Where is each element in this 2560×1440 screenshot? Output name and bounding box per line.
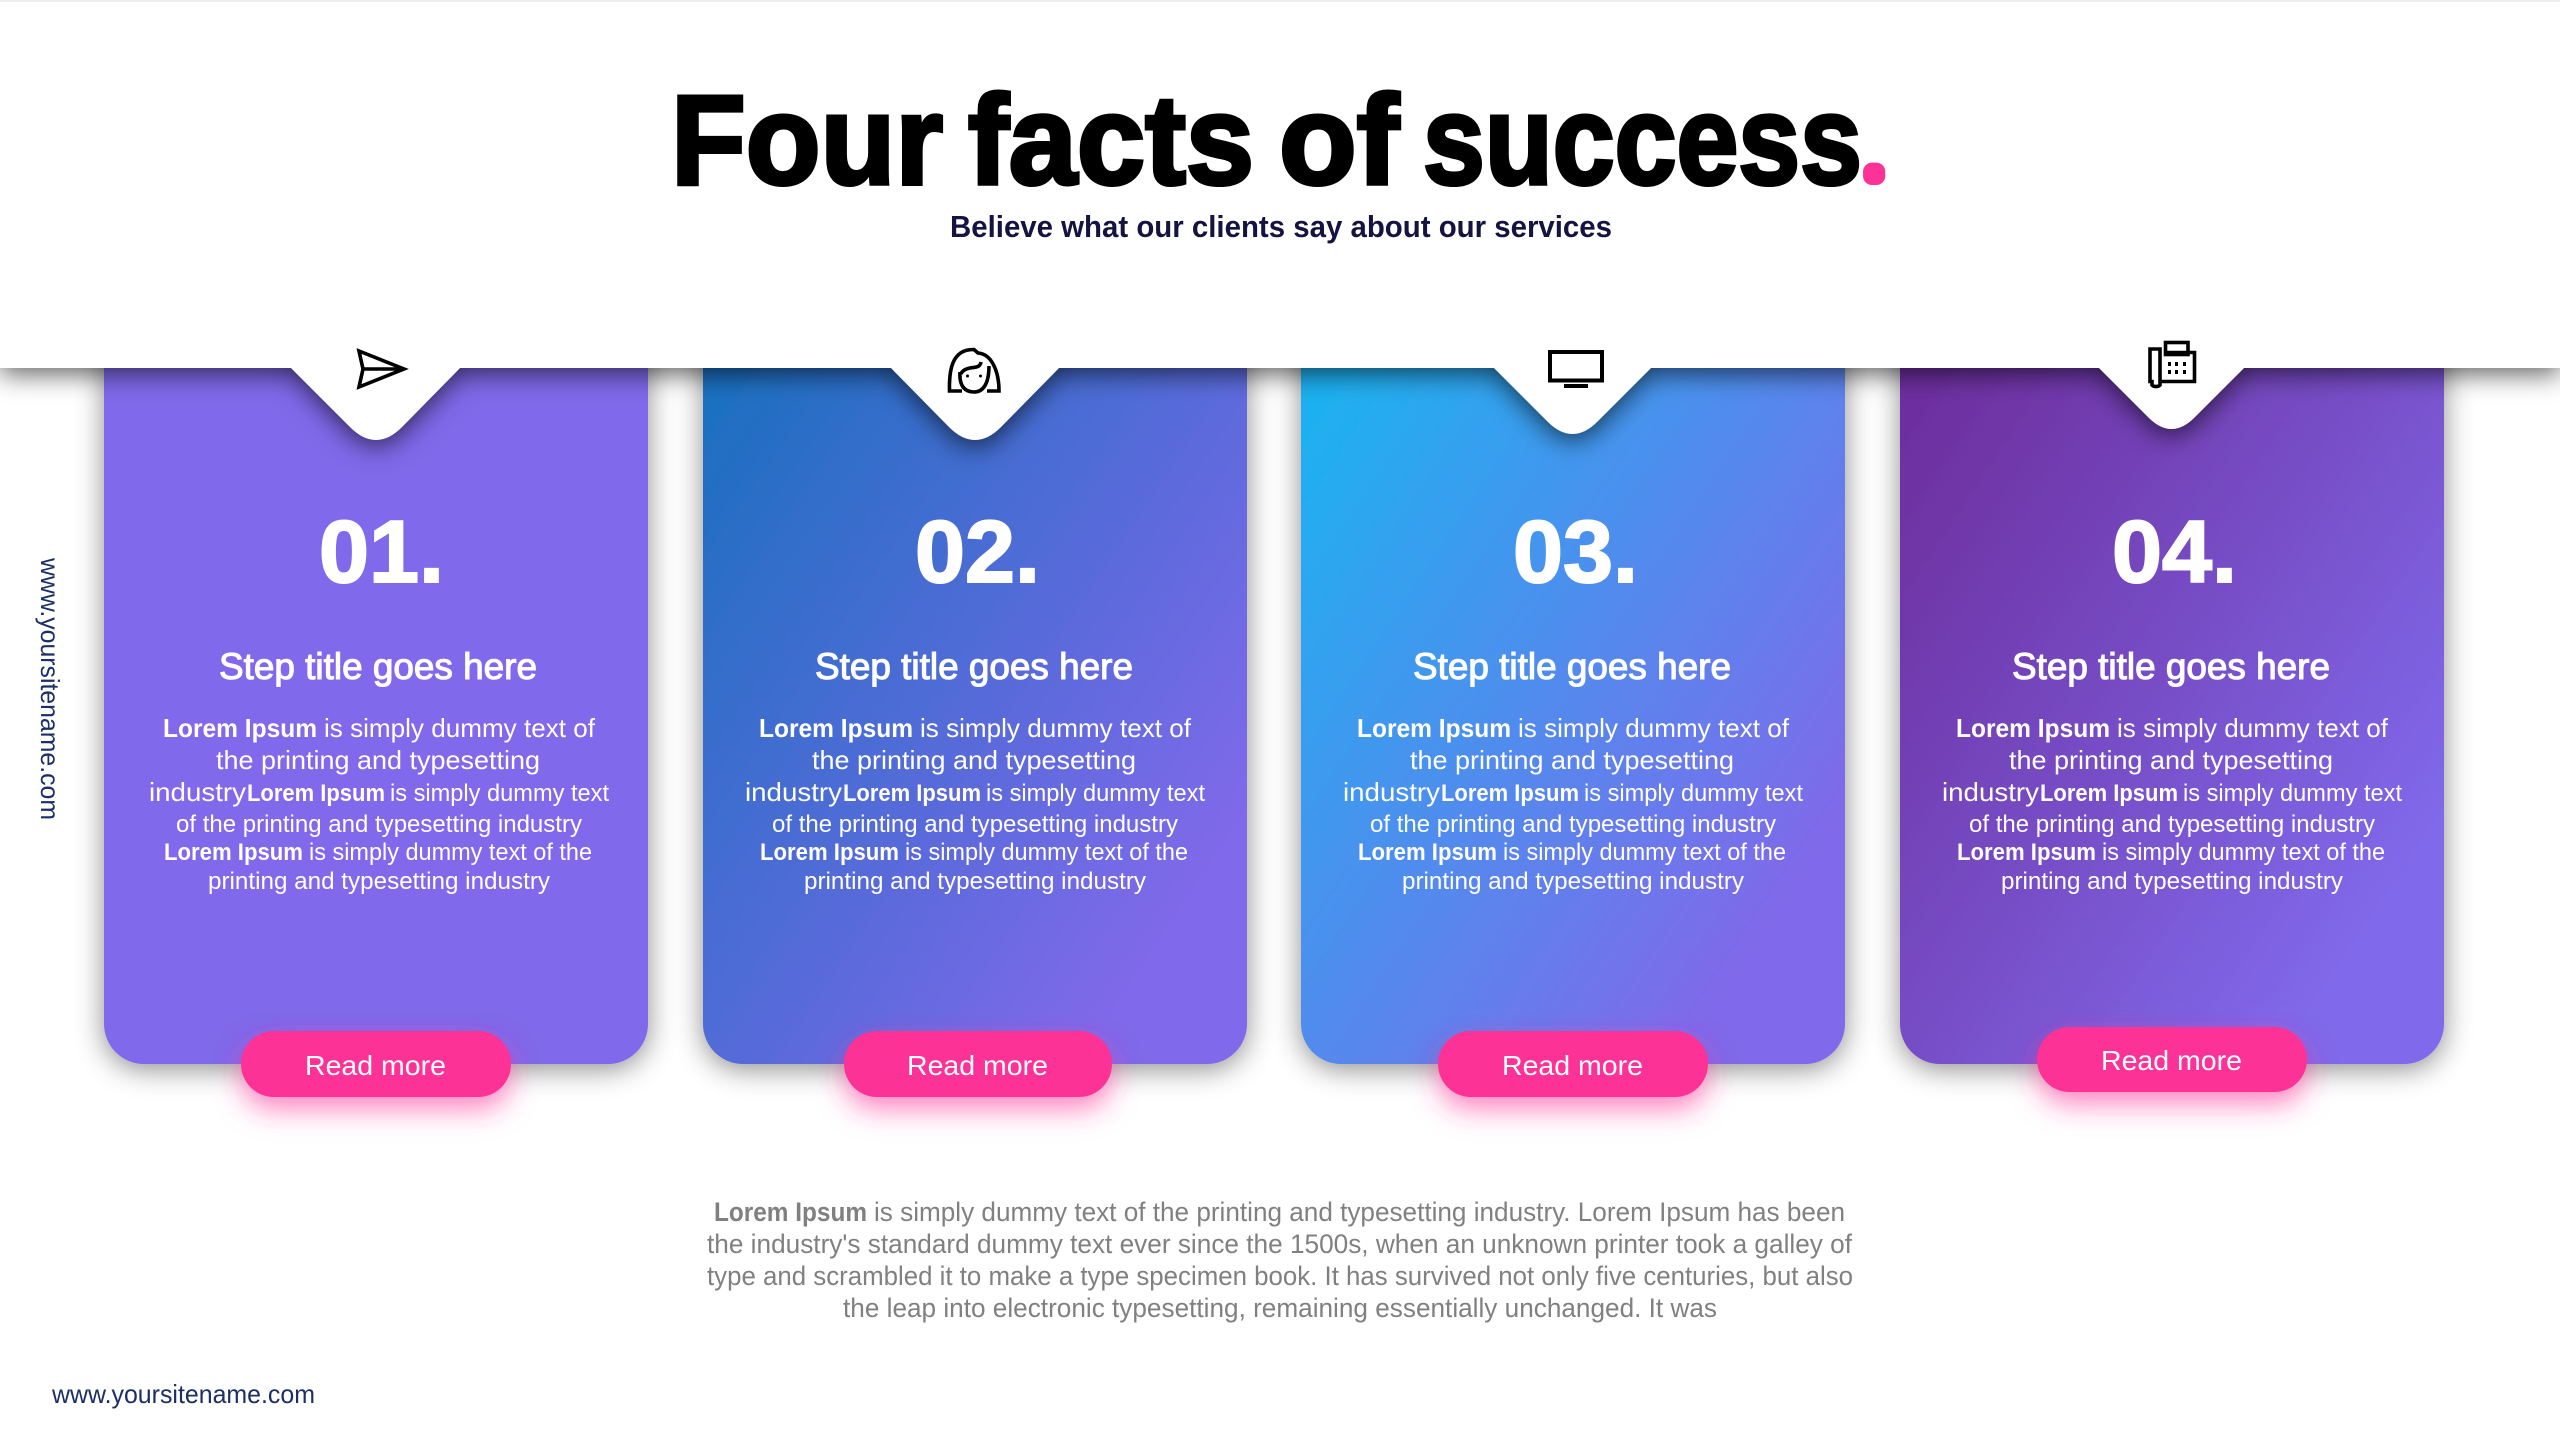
card 4 body text: industry xyxy=(1942,777,2039,807)
card 4 step title: Step title goes here xyxy=(2012,646,2330,687)
bottom paragraph xyxy=(707,1197,1853,1323)
card 2 body text: is simply dummy text of the xyxy=(905,839,1188,866)
card 4 body text: Lorem Ipsum xyxy=(1956,713,2110,743)
card 3 body text xyxy=(1343,713,1803,895)
bottom paragraph: Lorem Ipsum xyxy=(714,1197,867,1227)
card 1 number: 01. xyxy=(319,502,444,601)
card 3 body text: Lorem Ipsum xyxy=(1358,839,1497,866)
card 1 body text: is simply dummy text of the xyxy=(309,839,592,866)
card 2 body text: printing and typesetting industry xyxy=(804,868,1146,895)
icon: woman face xyxy=(949,349,999,392)
card 3 body text: industry xyxy=(1343,777,1440,807)
card 3 step title: Step title goes here xyxy=(1413,646,1731,687)
card 2 body text: Lorem Ipsum xyxy=(760,839,899,866)
card 2 body text: the printing and typesetting xyxy=(812,745,1136,775)
icon: fax machine xyxy=(2150,342,2194,387)
card 2 step title: Step title goes here xyxy=(815,646,1133,687)
card 4 body text: Lorem Ipsum xyxy=(2040,780,2178,807)
icon: monitor xyxy=(1550,352,1602,388)
card 4 body text: is simply dummy text xyxy=(2183,780,2402,807)
card 1 read more button: Read more xyxy=(305,1050,446,1081)
title xyxy=(671,69,1878,211)
card 4 body text: printing and typesetting industry xyxy=(2001,868,2343,895)
card 1 body text: of the printing and typesetting industry xyxy=(176,811,582,838)
card 2 body text: Lorem Ipsum xyxy=(759,713,913,743)
card 1 body text: is simply dummy text of xyxy=(324,713,596,743)
card 3 body text: of the printing and typesetting industry xyxy=(1370,811,1776,838)
card 3 read more button: Read more xyxy=(1502,1050,1643,1081)
card 1 body text: Lorem Ipsum xyxy=(164,839,303,866)
card 3 body text: is simply dummy text of xyxy=(1518,713,1790,743)
card 4 body text xyxy=(1942,713,2402,895)
panel: card 4 xyxy=(1900,290,2444,1092)
card 4 read more button xyxy=(2037,1027,2307,1092)
card 2 body text xyxy=(745,713,1205,895)
card 4 body text: the printing and typesetting xyxy=(2009,745,2333,775)
card 3 body text: is simply dummy text of the xyxy=(1503,839,1786,866)
card 1 body text: the printing and typesetting xyxy=(216,745,540,775)
card 1 body text: industry xyxy=(149,777,246,807)
title: facts xyxy=(968,69,1254,211)
bottom paragraph: the industry's standard dummy text ever since the 1500s, when an unknown printer took a galley of xyxy=(707,1229,1852,1259)
card 2 body text: of the printing and typesetting industry xyxy=(772,811,1178,838)
bottom paragraph: is simply dummy text of the printing and typesetting industry. Lorem Ipsum has been xyxy=(874,1197,1845,1227)
vertical side url: www.yoursitename.com xyxy=(35,557,65,820)
bottom paragraph: the leap into electronic typesetting, remaining essentially unchanged. It was xyxy=(843,1293,1717,1323)
card 1 body text xyxy=(149,713,609,895)
card 1 body text: printing and typesetting industry xyxy=(208,868,550,895)
card 1 body text: Lorem Ipsum xyxy=(163,713,317,743)
title: of xyxy=(1279,69,1400,211)
card 2 body text: Lorem Ipsum xyxy=(843,780,981,807)
card 4 read more button: Read more xyxy=(2101,1045,2242,1076)
panel: card 2 xyxy=(703,290,1247,1097)
card 2 read more button xyxy=(844,1031,1112,1097)
card 2 read more button: Read more xyxy=(907,1050,1048,1081)
title: success xyxy=(1423,69,1862,211)
card 4 body text: of the printing and typesetting industry xyxy=(1969,811,2375,838)
card 2 body text: is simply dummy text xyxy=(986,780,1205,807)
title pink period: . xyxy=(1870,150,1878,183)
card 4 number: 04. xyxy=(2112,502,2237,601)
panel: card 1 xyxy=(104,290,648,1097)
title: Four xyxy=(671,69,943,211)
icon: paper plane xyxy=(359,351,404,387)
card 4 body text: is simply dummy text of the xyxy=(2102,839,2385,866)
card 3 body text: Lorem Ipsum xyxy=(1357,713,1511,743)
panel: card 3 xyxy=(1301,290,1845,1097)
card 2 body text: is simply dummy text of xyxy=(920,713,1192,743)
header band with notches xyxy=(0,0,2560,440)
subtitle: Believe what our clients say about our services xyxy=(950,209,1612,244)
card 1 background xyxy=(104,290,648,1064)
card 3 read more button xyxy=(1438,1031,1708,1097)
card 3 number: 03. xyxy=(1513,502,1638,601)
card 2 body text: industry xyxy=(745,777,842,807)
card 1 read more button xyxy=(241,1031,511,1097)
card 3 background xyxy=(1301,290,1845,1064)
card 1 step title: Step title goes here xyxy=(219,646,537,687)
card 1 body text: is simply dummy text xyxy=(390,780,609,807)
card 2 number: 02. xyxy=(915,502,1040,601)
bottom paragraph: type and scrambled it to make a type specimen book. It has survived not only five centuries, but also xyxy=(707,1261,1853,1291)
card 1 body text: Lorem Ipsum xyxy=(247,780,385,807)
card 3 body text: Lorem Ipsum xyxy=(1441,780,1579,807)
card 4 background xyxy=(1900,290,2444,1064)
card 2 background xyxy=(703,290,1247,1064)
card 3 body text: is simply dummy text xyxy=(1584,780,1803,807)
card 4 body text: Lorem Ipsum xyxy=(1957,839,2096,866)
card 3 body text: printing and typesetting industry xyxy=(1402,868,1744,895)
footer url: www.yoursitename.com xyxy=(51,1379,315,1409)
card 3 body text: the printing and typesetting xyxy=(1410,745,1734,775)
card 4 body text: is simply dummy text of xyxy=(2117,713,2389,743)
